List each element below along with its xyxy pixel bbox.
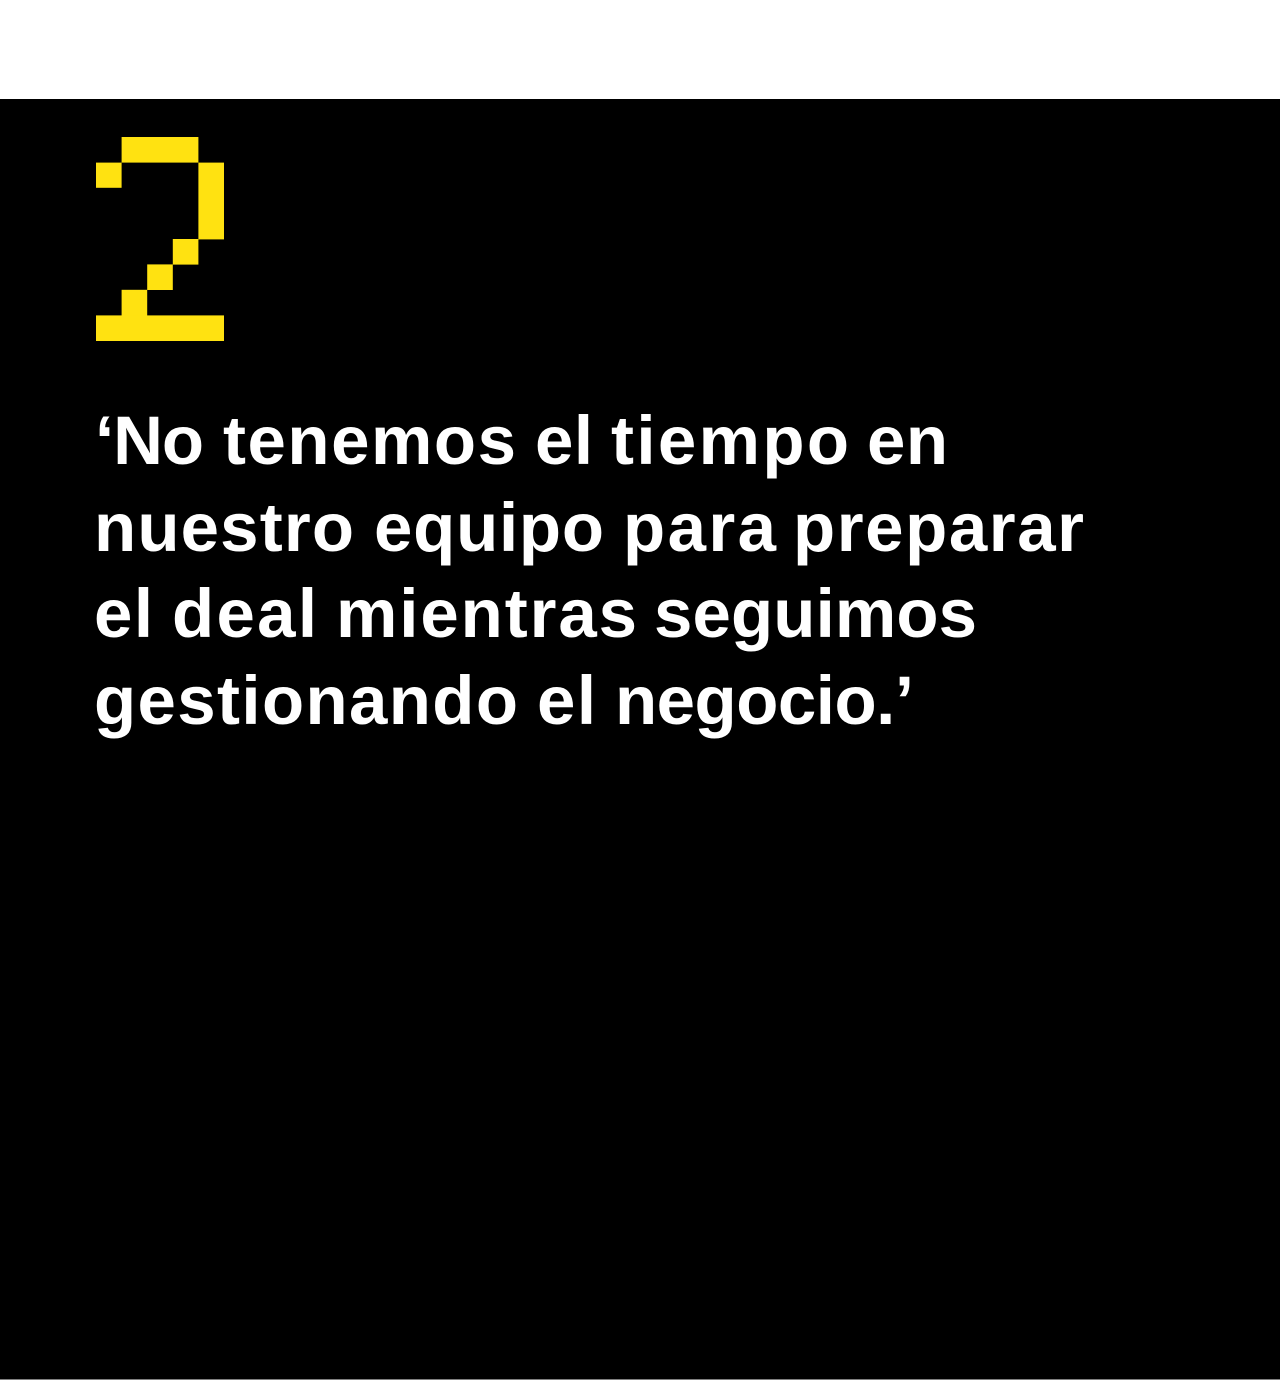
icon: yellow pixel numeral 2 xyxy=(96,137,224,341)
quote text: el xyxy=(537,662,596,739)
quote text: para xyxy=(623,489,777,566)
quote text: gestionando xyxy=(94,662,518,739)
quote text: ‘No xyxy=(95,402,204,479)
quote text: el xyxy=(535,402,593,479)
quote text: nuestro xyxy=(94,489,354,566)
quote text: en xyxy=(867,402,948,479)
quote text: tenemos xyxy=(223,402,516,479)
quote text: negocio.’ xyxy=(615,662,914,739)
quote text: preparar xyxy=(793,489,1084,566)
quote text: deal xyxy=(172,575,317,652)
quote text: seguimos xyxy=(654,575,977,652)
quote text: tiempo xyxy=(611,402,849,479)
quote text xyxy=(94,402,1084,739)
quote text: el xyxy=(94,575,153,652)
quote text: equipo xyxy=(374,489,604,566)
quote text: mientras xyxy=(336,575,637,652)
